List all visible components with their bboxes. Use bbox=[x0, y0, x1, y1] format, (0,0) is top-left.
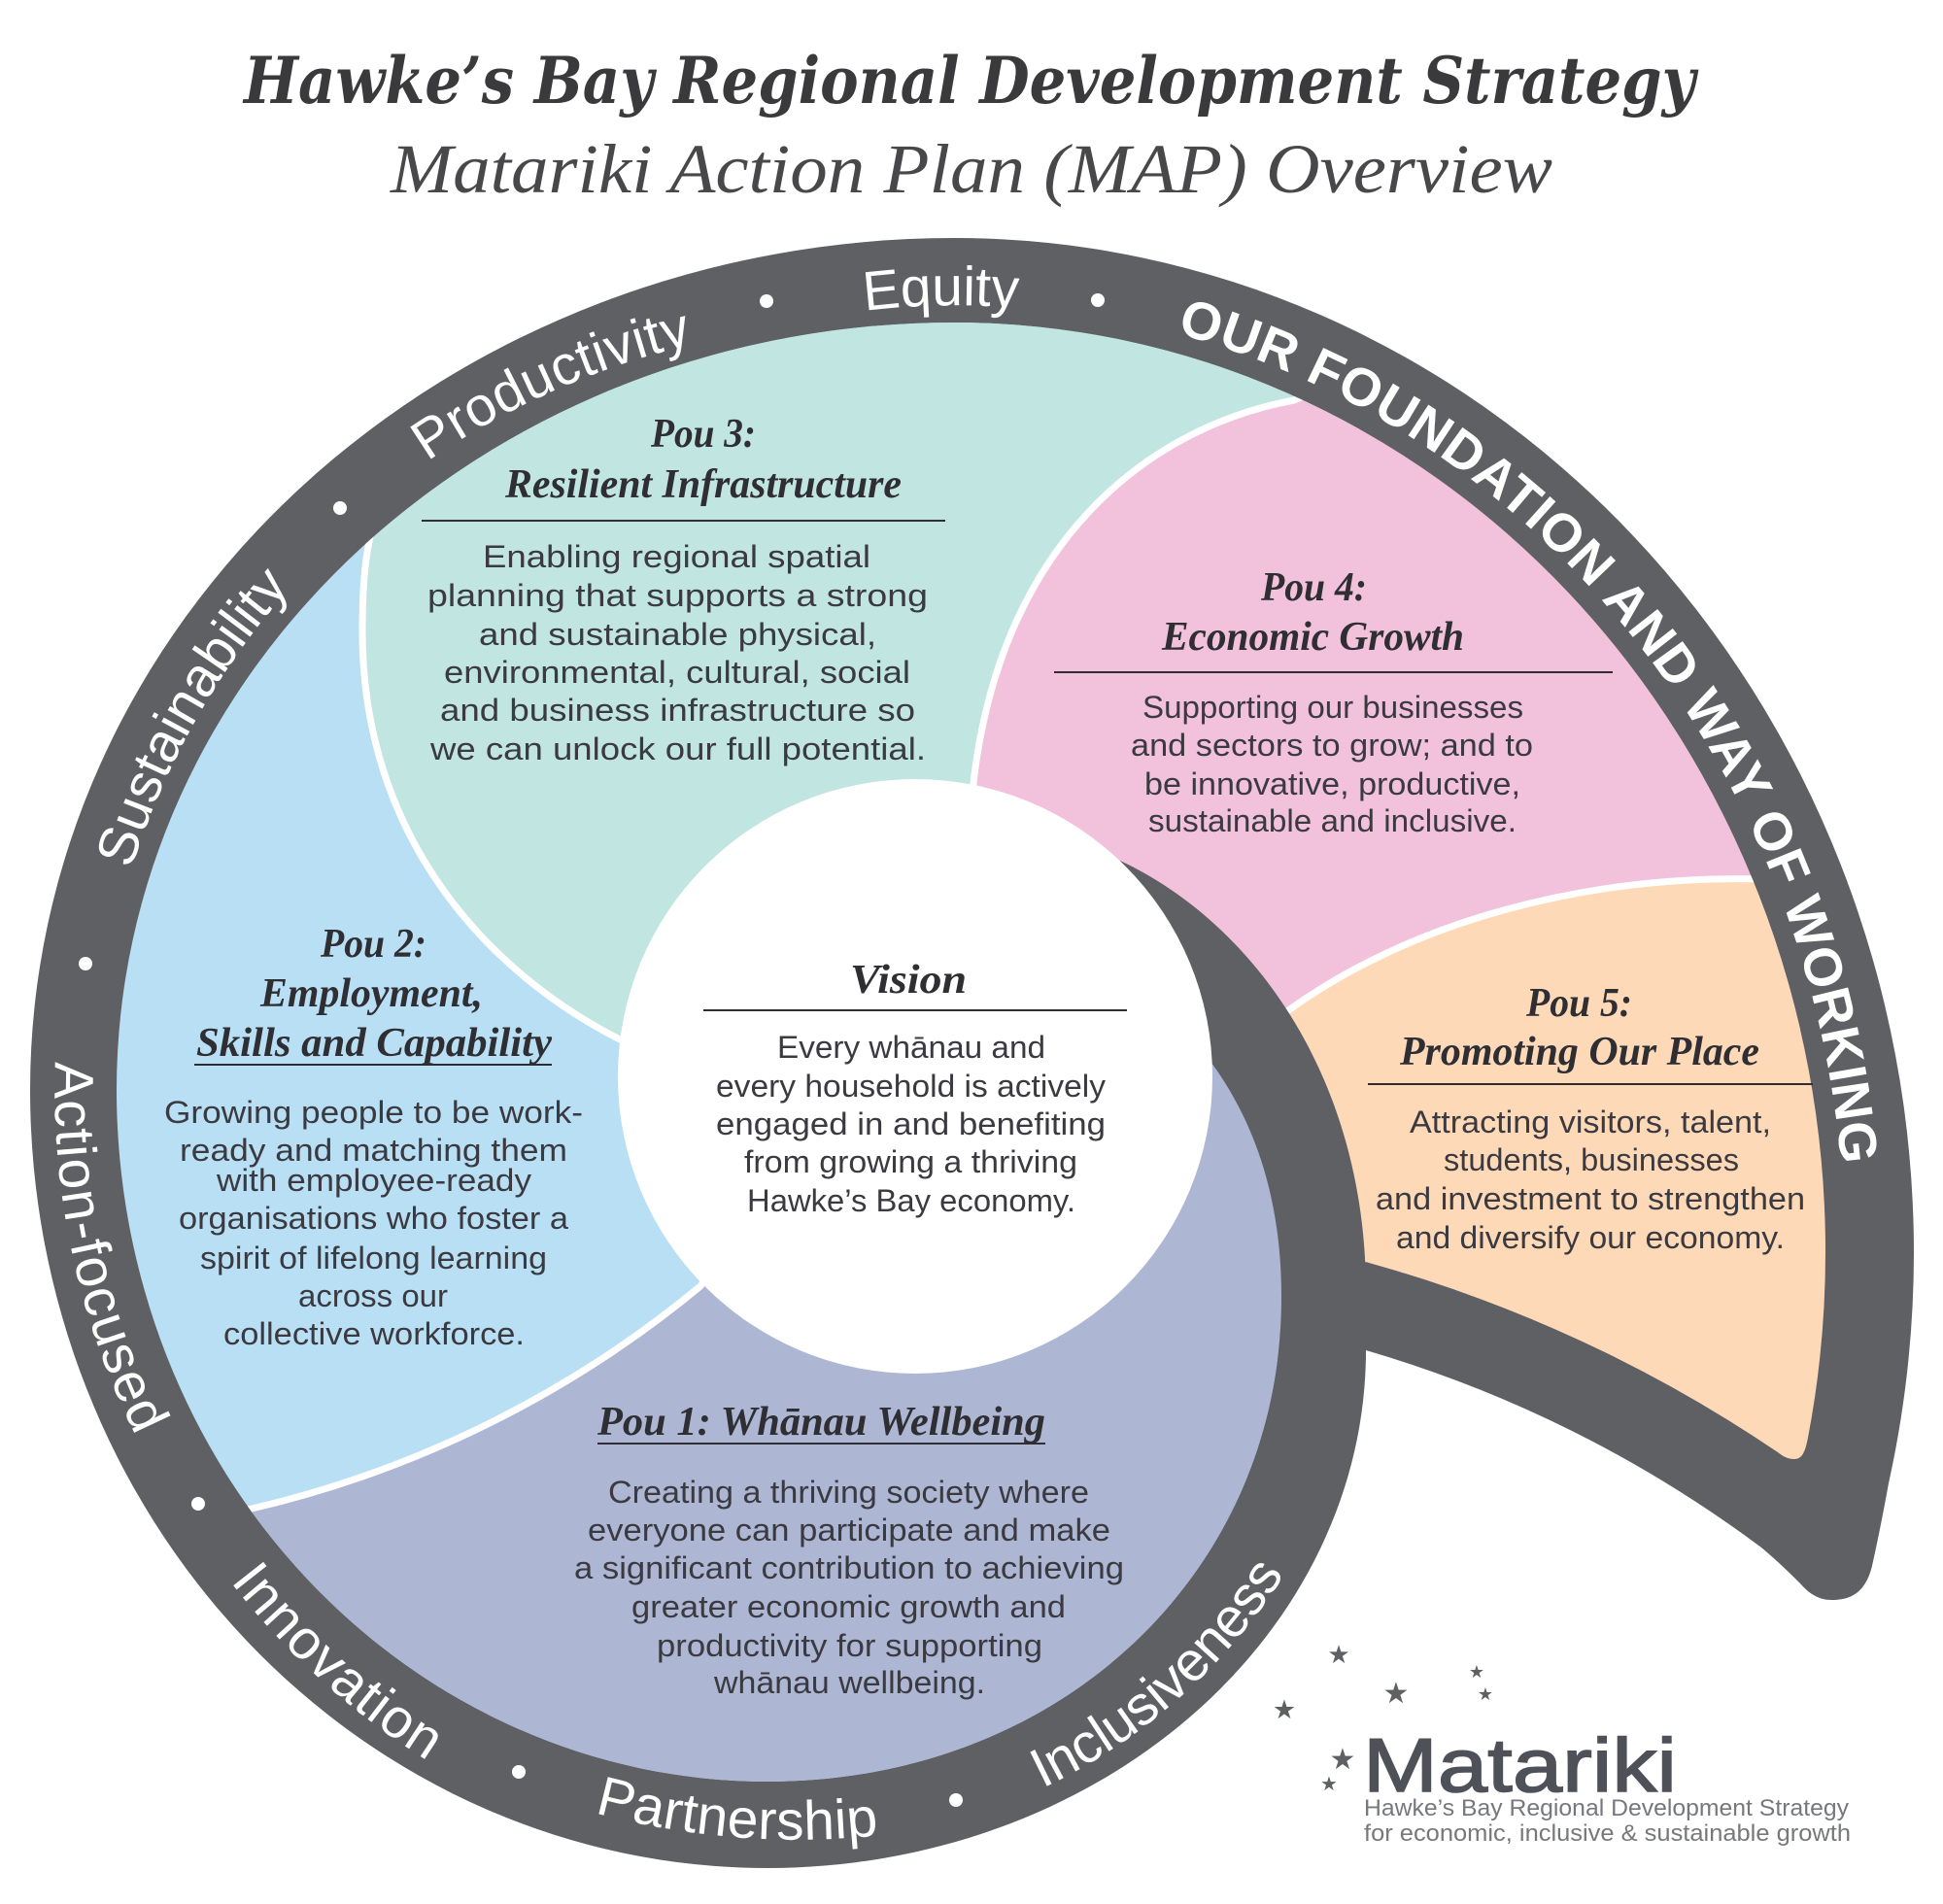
logo: Matariki: for economic, inclusive & sustainable growth bbox=[1364, 1820, 1851, 1847]
Pou 5 body: students, businesses bbox=[1444, 1142, 1739, 1177]
Vision body: engaged in and benefiting bbox=[716, 1106, 1106, 1141]
Pou 4 heading: Pou 4: bbox=[1260, 565, 1367, 610]
icon: Matariki stars bbox=[1273, 1641, 1493, 1795]
text block: Pou 5 bbox=[1368, 981, 1813, 1255]
Pou 1 body: productivity for supporting bbox=[657, 1628, 1042, 1663]
text block: Pou 1 bbox=[574, 1400, 1124, 1700]
icon: Matariki stars: ★ bbox=[1469, 1662, 1484, 1683]
Pou 3 body: planning that supports a strong bbox=[427, 578, 928, 613]
Pou 1 body: a significant contribution to achieving bbox=[574, 1550, 1124, 1585]
logo wordmark: Matariki bbox=[1363, 1722, 1677, 1808]
panel: Pou 4 shape bbox=[976, 398, 1800, 1273]
dividers between upper panels bbox=[972, 389, 1763, 1035]
Pou 1 body: greater economic growth and bbox=[631, 1589, 1066, 1624]
Pou 3 body: and sustainable physical, bbox=[479, 617, 876, 652]
word: Equity: Equity bbox=[865, 265, 1020, 319]
text block: Pou 3 bbox=[422, 412, 945, 766]
panel: Pou 2 shape bbox=[97, 291, 1360, 1807]
logo tagline: Hawke’s Bay Regional Development Strategy bbox=[1364, 1795, 1849, 1821]
word: Partnership: Partnership bbox=[598, 1777, 875, 1850]
Pou 4 body: Supporting our businesses bbox=[1142, 690, 1523, 725]
icon: Matariki stars: ★ bbox=[1273, 1695, 1296, 1725]
text block: Pou 2: Employment, bbox=[259, 971, 483, 1016]
Pou 1 body bbox=[574, 1475, 1124, 1700]
Vision body: Hawke’s Bay economy. bbox=[747, 1183, 1075, 1218]
text block: Pou 3: Resilient Infrastructure bbox=[504, 462, 902, 507]
Pou 3 body bbox=[427, 539, 928, 766]
word: Action-focused: Action-focused bbox=[54, 1062, 171, 1433]
text block: Pou 4 bbox=[1054, 565, 1613, 838]
ring heading: our foundation and way of working: OUR FOUNDATION AND WAY OF WORKING bbox=[1183, 302, 1877, 1161]
Pou 2 body: collective workforce. bbox=[223, 1316, 525, 1351]
Pou 4 body: be innovative, productive, bbox=[1144, 766, 1520, 801]
Pou 2 body bbox=[164, 1095, 583, 1351]
icon: Matariki stars: ★ bbox=[1320, 1772, 1338, 1795]
text block: Pou 2 bbox=[164, 922, 583, 1351]
Pou 1 heading: Pou 1: Whānau Wellbeing bbox=[597, 1400, 1045, 1445]
Pou 2 body: organisations who foster a bbox=[179, 1201, 568, 1236]
Vision body: from growing a thriving bbox=[744, 1144, 1077, 1179]
dividers between lower panels bbox=[248, 536, 704, 1512]
text block: Pou 4: Economic Growth bbox=[1161, 615, 1464, 660]
icon: Matariki stars: ★ bbox=[1478, 1684, 1493, 1705]
ring words: foundation values bbox=[54, 265, 1877, 1850]
Pou 5 body: Attracting visitors, talent, bbox=[1410, 1105, 1771, 1139]
text block: Pou 2: Skills and Capability bbox=[196, 1021, 552, 1066]
text block: Vision bbox=[703, 958, 1127, 1218]
Pou 2 body: ready and matching them bbox=[180, 1133, 567, 1168]
Pou 5 body: and diversify our economy. bbox=[1396, 1220, 1785, 1255]
Pou 3 body: and business infrastructure so bbox=[440, 693, 915, 728]
title bbox=[242, 43, 1699, 208]
logo: Matariki bbox=[1273, 1641, 1851, 1847]
Vision body: every household is actively bbox=[716, 1069, 1106, 1104]
Pou 1 body: whānau wellbeing. bbox=[713, 1665, 985, 1700]
Pou 4 body: and sectors to grow; and to bbox=[1131, 728, 1533, 763]
Pou 3 body: we can unlock our full potential. bbox=[429, 731, 926, 766]
Pou 4 body bbox=[1131, 690, 1533, 838]
icon: Matariki stars: ★ bbox=[1383, 1677, 1409, 1711]
word: Productivity: Productivity bbox=[410, 316, 686, 459]
Pou 1 body: everyone can participate and make bbox=[588, 1513, 1110, 1547]
lower colour panels bbox=[248, 536, 1281, 1782]
panel: Pou 1 shape bbox=[250, 1064, 1281, 1782]
inner spiral crescent bbox=[1120, 861, 1366, 1360]
Pou 5 body: and investment to strengthen bbox=[1376, 1181, 1805, 1216]
Vision body bbox=[716, 1030, 1106, 1218]
Vision heading: Vision bbox=[850, 958, 967, 1003]
word: Sustainability: Sustainability bbox=[99, 567, 287, 865]
Pou 4 body: sustainable and inclusive. bbox=[1148, 803, 1517, 838]
vision circle bbox=[618, 779, 1212, 1374]
icon: Matariki stars: ★ bbox=[1330, 1743, 1355, 1777]
Pou 1 body: Creating a thriving society where bbox=[608, 1475, 1089, 1510]
panel: Pou 5 shape bbox=[1290, 878, 1825, 1459]
Pou 5 body bbox=[1376, 1105, 1805, 1255]
Pou 2 body: spirit of lifelong learning bbox=[200, 1241, 547, 1275]
icon: Matariki stars: ★ bbox=[1327, 1641, 1350, 1670]
Vision body: Every whānau and bbox=[777, 1030, 1045, 1065]
ring separator dots bbox=[79, 293, 1105, 1807]
Pou 3 body: Enabling regional spatial bbox=[483, 539, 870, 574]
Pou 2 heading: Pou 2: bbox=[320, 922, 426, 967]
Pou 5 heading: Pou 5: bbox=[1525, 981, 1632, 1026]
subtitle: Matariki Action Plan (MAP) Overview bbox=[390, 130, 1552, 208]
Pou 2 body: with employee-ready bbox=[216, 1163, 531, 1198]
Pou 2 body: across our bbox=[298, 1278, 448, 1313]
main heading: Hawke’s Bay Regional Development Strategy bbox=[242, 43, 1699, 119]
Pou 3 heading: Pou 3: bbox=[650, 412, 756, 457]
Pou 2 body: Growing people to be work- bbox=[164, 1095, 583, 1130]
upper colour panels bbox=[117, 323, 1825, 1782]
word: Inclusiveness: Inclusiveness bbox=[1030, 1563, 1280, 1786]
word: Innovation: Innovation bbox=[233, 1562, 438, 1759]
text block: Pou 5: Promoting Our Place bbox=[1399, 1030, 1759, 1074]
Pou 3 body: environmental, cultural, social bbox=[444, 655, 910, 690]
panel: Pou 3 shape bbox=[365, 323, 1298, 1036]
